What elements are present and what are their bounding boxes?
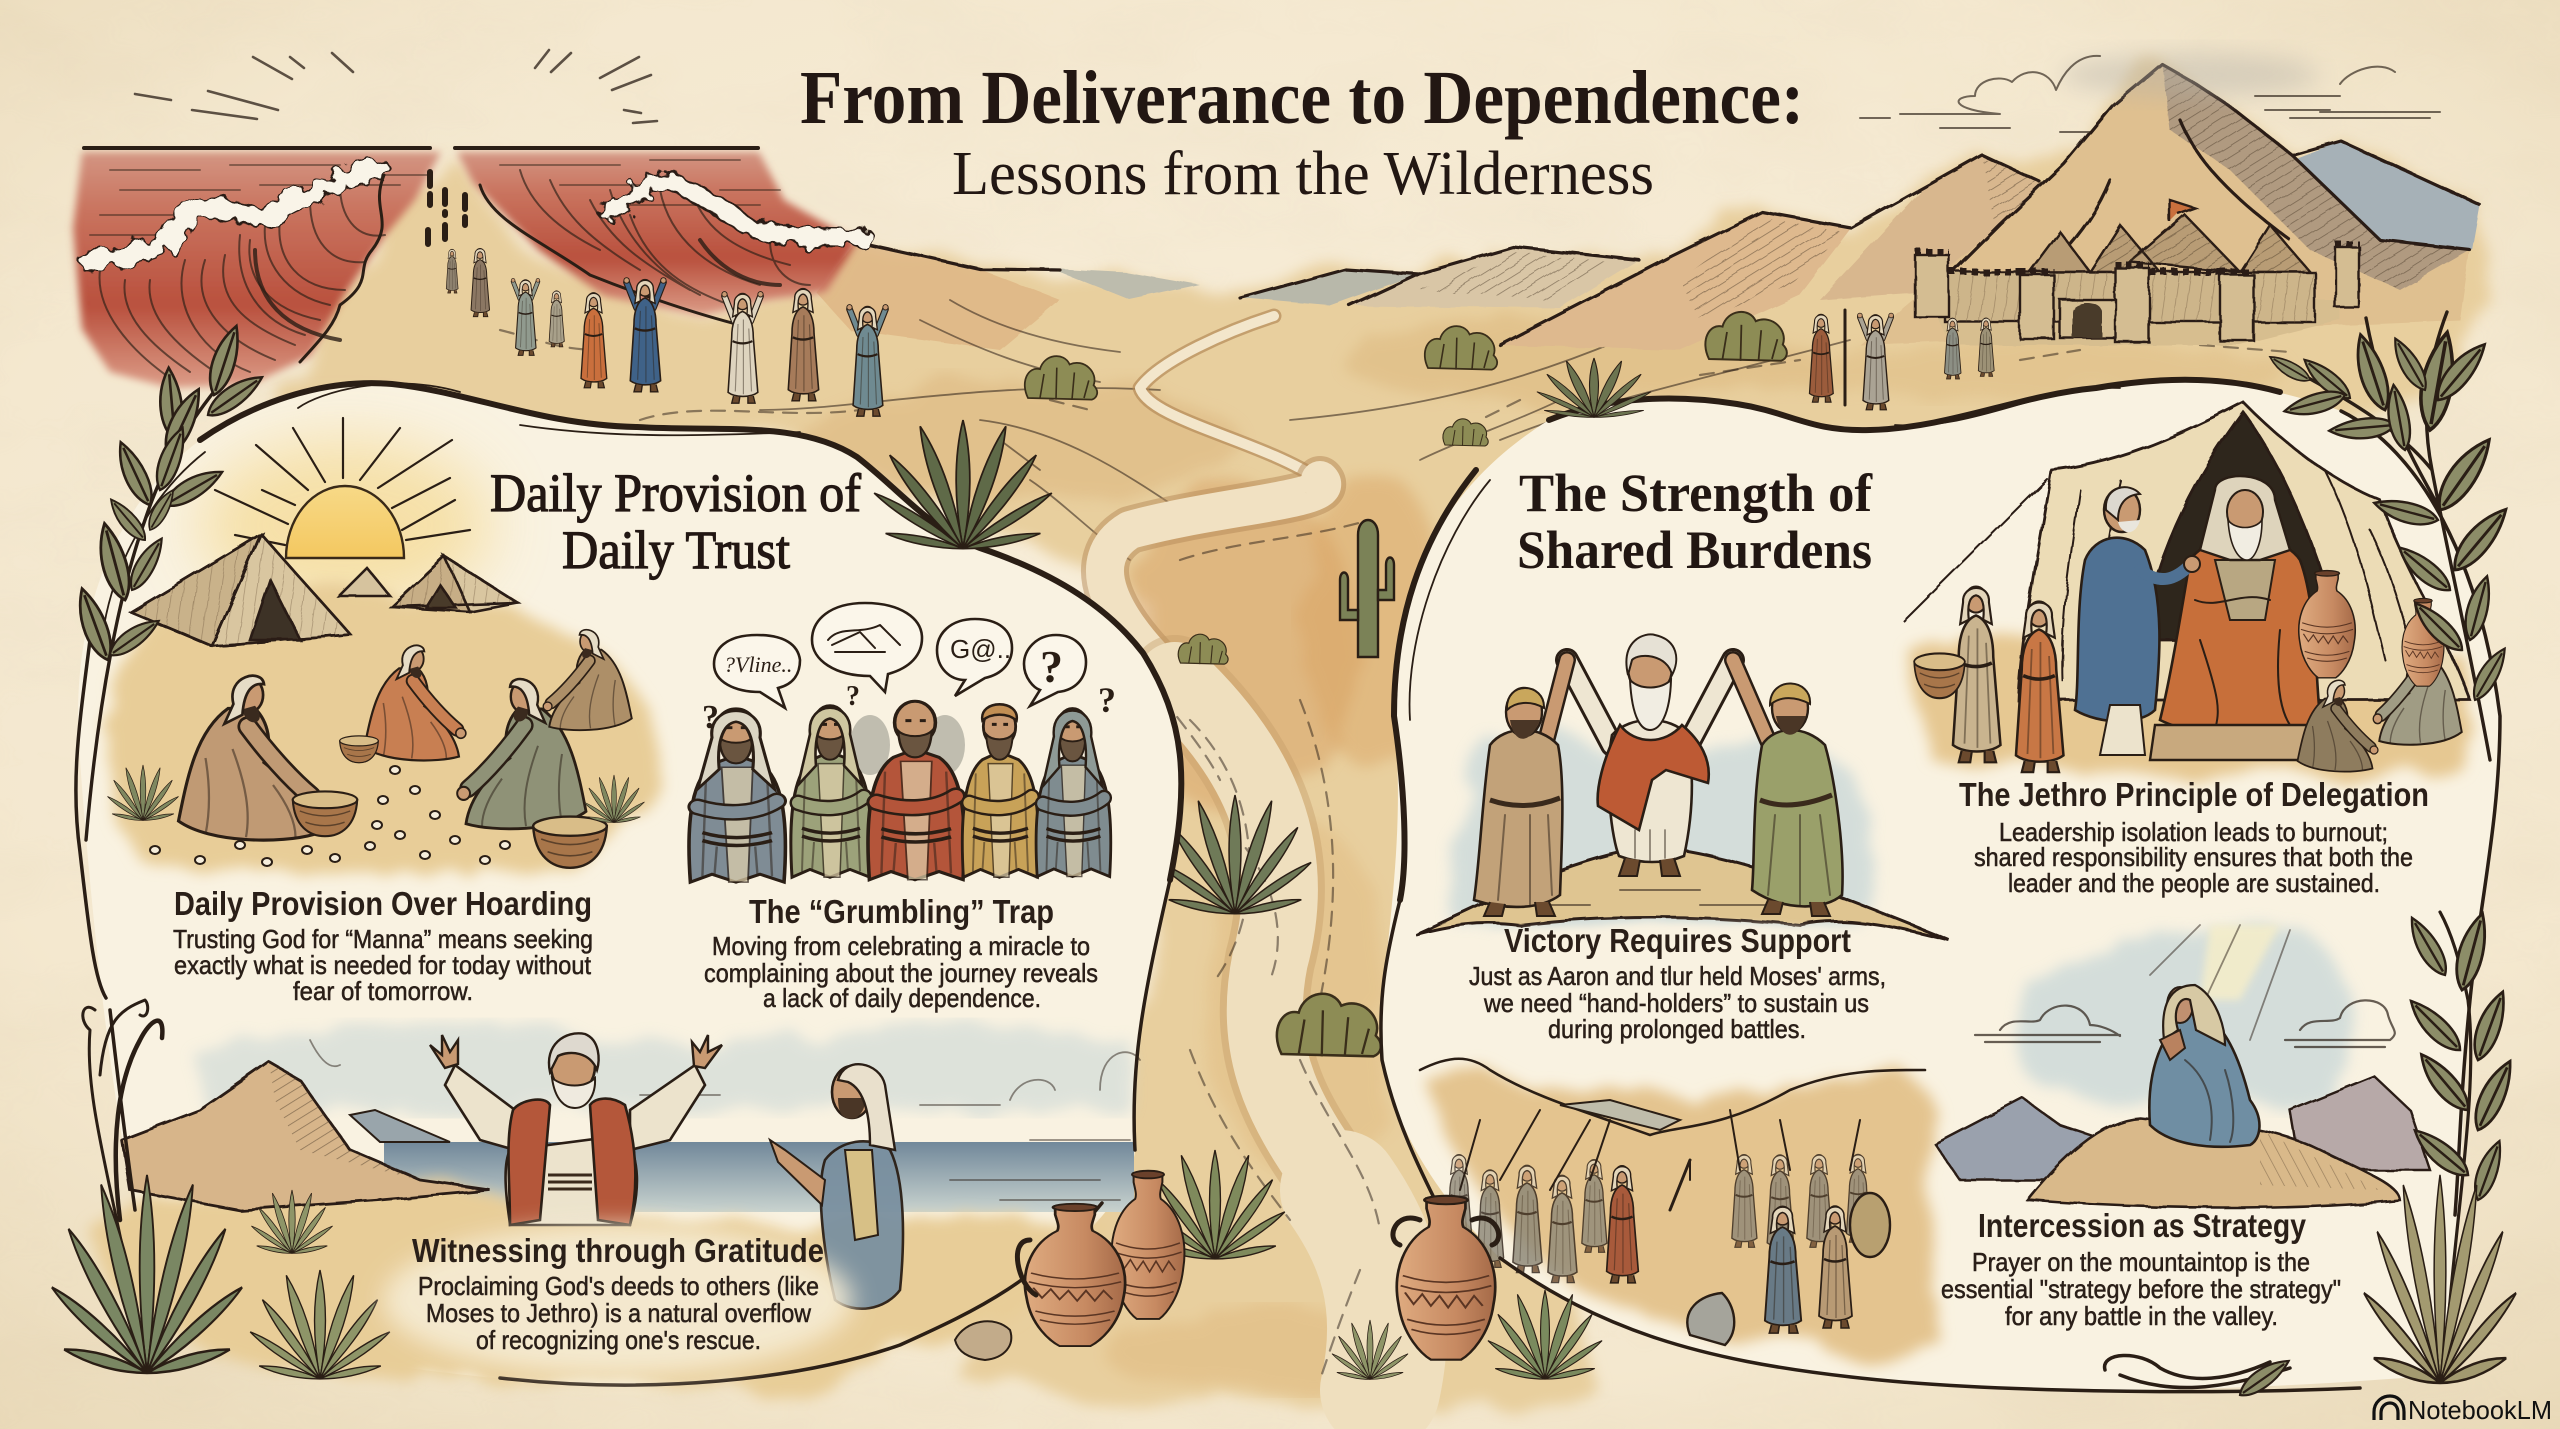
text block: Victory Requires Support: we need “hand-holders” to sustain us (1483, 988, 1869, 1018)
heading: The Strength of Shared Burdens: The Strength of (1519, 463, 1873, 523)
speech bubbles: G@.. (950, 634, 1011, 664)
text block: Victory Requires Support: Victory Requires Support (1504, 922, 1851, 959)
travellers approaching the camp (1809, 310, 1994, 410)
battle scene (1420, 1059, 1950, 1352)
olive branch: top right (2266, 312, 2514, 760)
text block: Intercession as Strategy: Prayer on the mountaintop is the (1972, 1247, 2310, 1277)
text block: Witnessing through Gratitude: Moses to Jethro) is a natural overflow (426, 1298, 811, 1328)
icon: tents (131, 534, 518, 646)
agave plants overlapping the panel edges (872, 358, 1653, 553)
text block: Daily Provision Over Hoarding: exactly what is needed for today without (174, 950, 592, 980)
road (1105, 316, 1387, 1390)
foam crests (90, 168, 865, 262)
text block: The Grumbling Trap: The “Grumbling” Trap (749, 893, 1054, 930)
text block: Witnessing through Gratitude (383, 1225, 853, 1375)
Witness scene: sky and sea (90, 1026, 1140, 1390)
text block: Daily Provision Over Hoarding (173, 885, 593, 1006)
text block: Intercession as Strategy: for any battle in the valley. (2005, 1301, 2278, 1331)
text block: The Grumbling Trap: a lack of daily dependence. (763, 983, 1041, 1013)
text block: The Grumbling Trap (704, 893, 1098, 1013)
listener (770, 1064, 903, 1309)
clouds near the mountain (1860, 53, 2440, 132)
text block: Intercession as Strategy: essential "strategy before the strategy" (1941, 1274, 2341, 1304)
text block: Daily Provision Over Hoarding: fear of tomorrow. (293, 976, 473, 1006)
hill: far left ridge (816, 242, 1060, 350)
Moses (1567, 634, 1733, 876)
text block: The Jethro Principle of Delegation (1959, 776, 2429, 898)
title (800, 56, 1804, 208)
sunrise (200, 418, 490, 610)
text block: Daily Provision Over Hoarding: Daily Provision Over Hoarding (174, 885, 592, 922)
ground under tent (1905, 632, 2470, 775)
Jethro standing (2075, 487, 2200, 755)
text block: Intercession as Strategy (1941, 1207, 2341, 1331)
speech bubbles: ?Vline.. (724, 652, 792, 677)
NotebookLM logo: NotebookLM (2408, 1395, 2552, 1425)
clay jars: left (955, 1171, 1184, 1360)
seated Moses (2150, 476, 2330, 760)
speech bubbles: ? (1098, 680, 1116, 720)
title: From Deliverance to Dependence: (800, 56, 1804, 140)
clay jar: centre (1331, 1196, 1604, 1382)
text block: The Grumbling Trap: complaining about the journey reveals (704, 958, 1098, 988)
fortress camp (1915, 200, 2359, 345)
Aaron (1474, 660, 1567, 916)
text block: Victory Requires Support (1469, 922, 1886, 1044)
foreground left: reeds, crook and agave (49, 1000, 392, 1382)
text block: Victory Requires Support: Just as Aaron and tlur held Moses' arms, (1469, 961, 1886, 991)
speech bubbles: ? (702, 699, 719, 736)
panel: Daily Provision of Daily Trust (76, 383, 1181, 1390)
wave curls (100, 170, 810, 378)
heading: The Strength of Shared Burdens (1517, 463, 1873, 580)
prayer scene (1935, 925, 2430, 1208)
speech bubbles: ? (1040, 641, 1063, 692)
title: Lessons from the Wilderness (952, 140, 1654, 208)
heading: Daily Provision of Daily Trust: Daily Provision of (490, 463, 861, 523)
camp ground (109, 582, 656, 875)
speech bubbles (702, 603, 1116, 736)
text block: Daily Provision Over Hoarding: Trusting God for “Manna” means seeking (173, 924, 593, 954)
Hur (1733, 660, 1843, 916)
plants on the path (1025, 312, 1787, 1262)
manna gatherers (106, 630, 645, 868)
text block: The Jethro Principle of Delegation: shared responsibility ensures that both the (1974, 842, 2413, 872)
heading: Daily Provision of Daily Trust: Daily Trust (562, 520, 790, 580)
icon: cactus (1340, 520, 1394, 657)
olive branch: left (71, 322, 267, 840)
text block: Witnessing through Gratitude: Witnessing through Gratitude (412, 1232, 824, 1269)
parted Red Sea (73, 148, 865, 388)
text block: The Jethro Principle of Delegation: Leadership isolation leads to burnout; (1999, 817, 2388, 847)
travellers leaving the sea (428, 172, 888, 416)
Moses with arms raised (430, 1033, 722, 1225)
text block: The Grumbling Trap: Moving from celebrating a miracle to (712, 931, 1090, 961)
olive branch and grass: bottom right (2105, 910, 2519, 1402)
distant mountains and Mount Sinai (857, 64, 2480, 350)
scattered ground strokes (500, 330, 2290, 1380)
text block: The Jethro Principle of Delegation: The Jethro Principle of Delegation (1959, 776, 2429, 813)
text block: Witnessing through Gratitude: Proclaiming God's deeds to others (like (418, 1271, 819, 1301)
text block: Witnessing through Gratitude: of recognizing one's rescue. (476, 1325, 761, 1355)
Aaron and Hur holding up Moses' arms (1415, 634, 1949, 940)
Jethro's tent (1904, 402, 2470, 700)
sun rays above the sea (135, 50, 657, 123)
heading: The Strength of Shared Burdens: Shared Burdens (1517, 520, 1872, 580)
text block: The Jethro Principle of Delegation: leader and the people are sustained. (2008, 868, 2380, 898)
text block: Victory Requires Support: during prolonged battles. (1548, 1014, 1806, 1044)
speech bubbles: ? (846, 681, 860, 712)
text block: Intercession as Strategy: Intercession as Strategy (1978, 1207, 2307, 1244)
children and workers by the tent (1914, 571, 2462, 772)
grumbling crowd (689, 701, 1111, 882)
panel: The Strength of Shared Burdens (1381, 380, 2500, 1392)
heading: Daily Provision of Daily Trust (490, 463, 861, 580)
